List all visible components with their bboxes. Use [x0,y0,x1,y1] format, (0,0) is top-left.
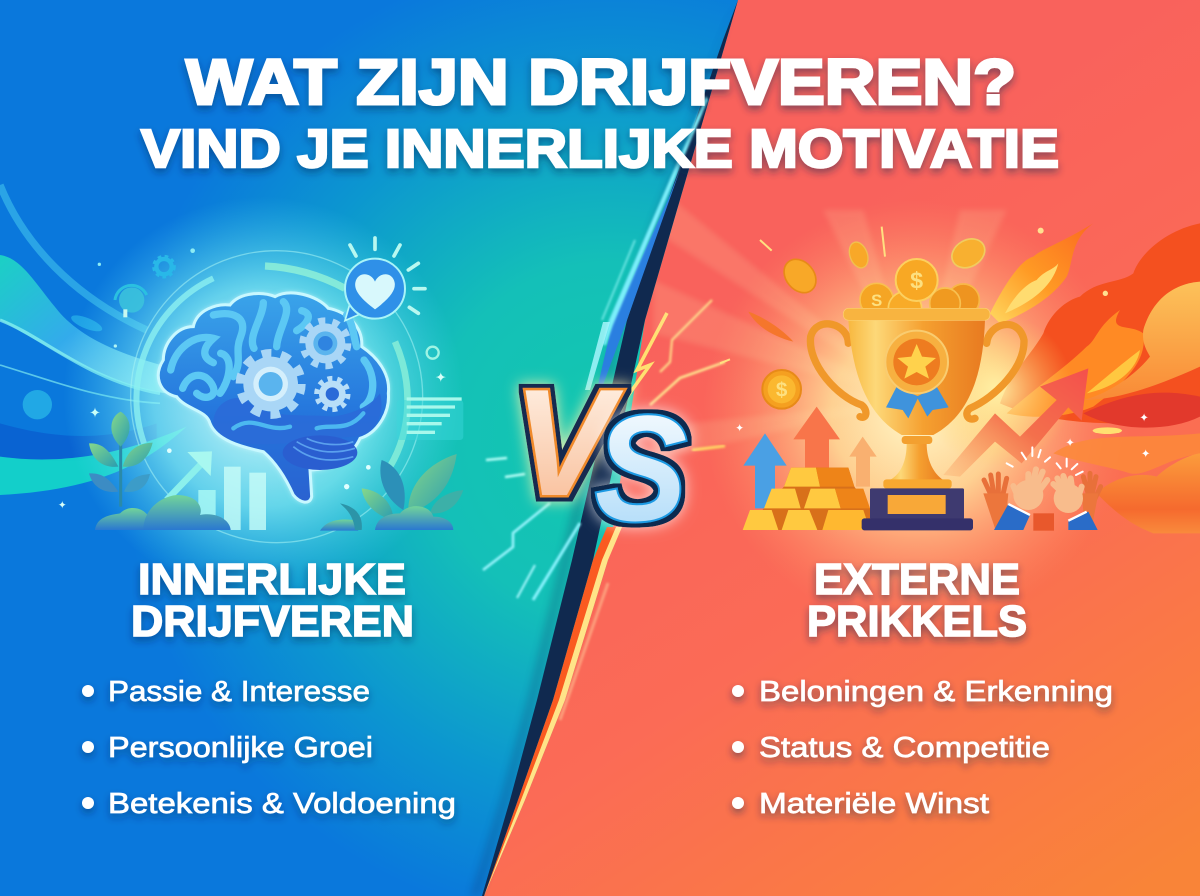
list: innerlijke items [82,676,456,820]
list: externe items [732,676,1113,820]
rings and arcs [131,251,423,543]
background waves [0,185,187,495]
trophy [810,259,1024,530]
icon: sprout left [89,412,153,507]
title line 2: VIND JE INNERLIJKE MOTIVATIE [141,119,1059,179]
title line 1: WAT ZIJN DRIJFVEREN? [186,46,1016,118]
diagonal divider with lightning [470,0,738,896]
cerebellum [283,435,357,470]
gears [240,321,348,415]
panel: innerlijke drijfveren text [82,555,456,820]
panel: blue left background [0,0,760,896]
flames and clouds: ✦ [1065,438,1075,450]
icon: small gear and magnifier: ✦ [435,370,446,385]
icon: small gear and magnifier [58,248,446,511]
list: externe items: Materiële Winst [759,788,989,820]
list: innerlijke items: Persoonlijke Groei [108,732,373,764]
icon: heart speech bubble [345,238,425,321]
icon: floating coins [762,233,990,409]
central glow [63,197,463,597]
heading: externe prikkels [807,555,1027,646]
heading: externe prikkels: EXTERNE [814,555,1020,604]
list: externe items: Beloningen & Erkenning [759,676,1113,708]
trophy handles [810,324,1024,419]
icon: text card [397,399,463,440]
icon: floating coins: $ [776,379,788,402]
panel: coral right background [484,0,1200,896]
heading: innerlijke drijfveren: INNERLIJKE [138,555,406,604]
coins in cup [859,258,980,308]
list: innerlijke items: Betekenis & Voldoening [108,788,456,820]
icon: foliage mounds [95,448,463,531]
icon: clapping hands [983,447,1101,531]
illustration: brain scene [0,185,463,597]
icon: small gear and magnifier: ✦ [58,499,67,511]
icon: gold bars [743,468,870,530]
arrow: rising zigzag [943,368,1088,477]
title [141,46,1059,179]
background hands [984,473,1101,503]
temporal lobe [213,393,382,444]
panel: externe prikkels text [732,555,1113,820]
list: innerlijke items: Passie & Interesse [108,676,370,708]
icon: small gear and magnifier: ✦ [89,405,101,421]
illustration: trophy scene [653,183,1200,627]
icon: upward arrows [743,407,877,508]
medal [885,331,949,418]
golden glow and rays [653,204,1110,606]
letter V: V [513,358,623,528]
icon: growth bars and arrow [167,451,266,530]
coins in cup: S [871,291,882,310]
flames and clouds: ✦ [1139,413,1149,425]
VS badge [513,358,687,552]
flames and clouds: ✦ [735,423,744,435]
flames and clouds: ✦ [1141,448,1150,460]
applauding hands [1013,469,1083,513]
heading: innerlijke drijfveren [131,555,414,646]
list: externe items: Status & Competitie [759,732,1050,764]
heading: innerlijke drijfveren: DRIJFVEREN [131,597,414,646]
brain folds [171,302,373,407]
heading: externe prikkels: PRIKKELS [807,597,1027,646]
brain [158,293,389,502]
flames and clouds [720,223,1200,533]
letter S: S [595,384,687,552]
coins in cup: $ [910,267,923,293]
